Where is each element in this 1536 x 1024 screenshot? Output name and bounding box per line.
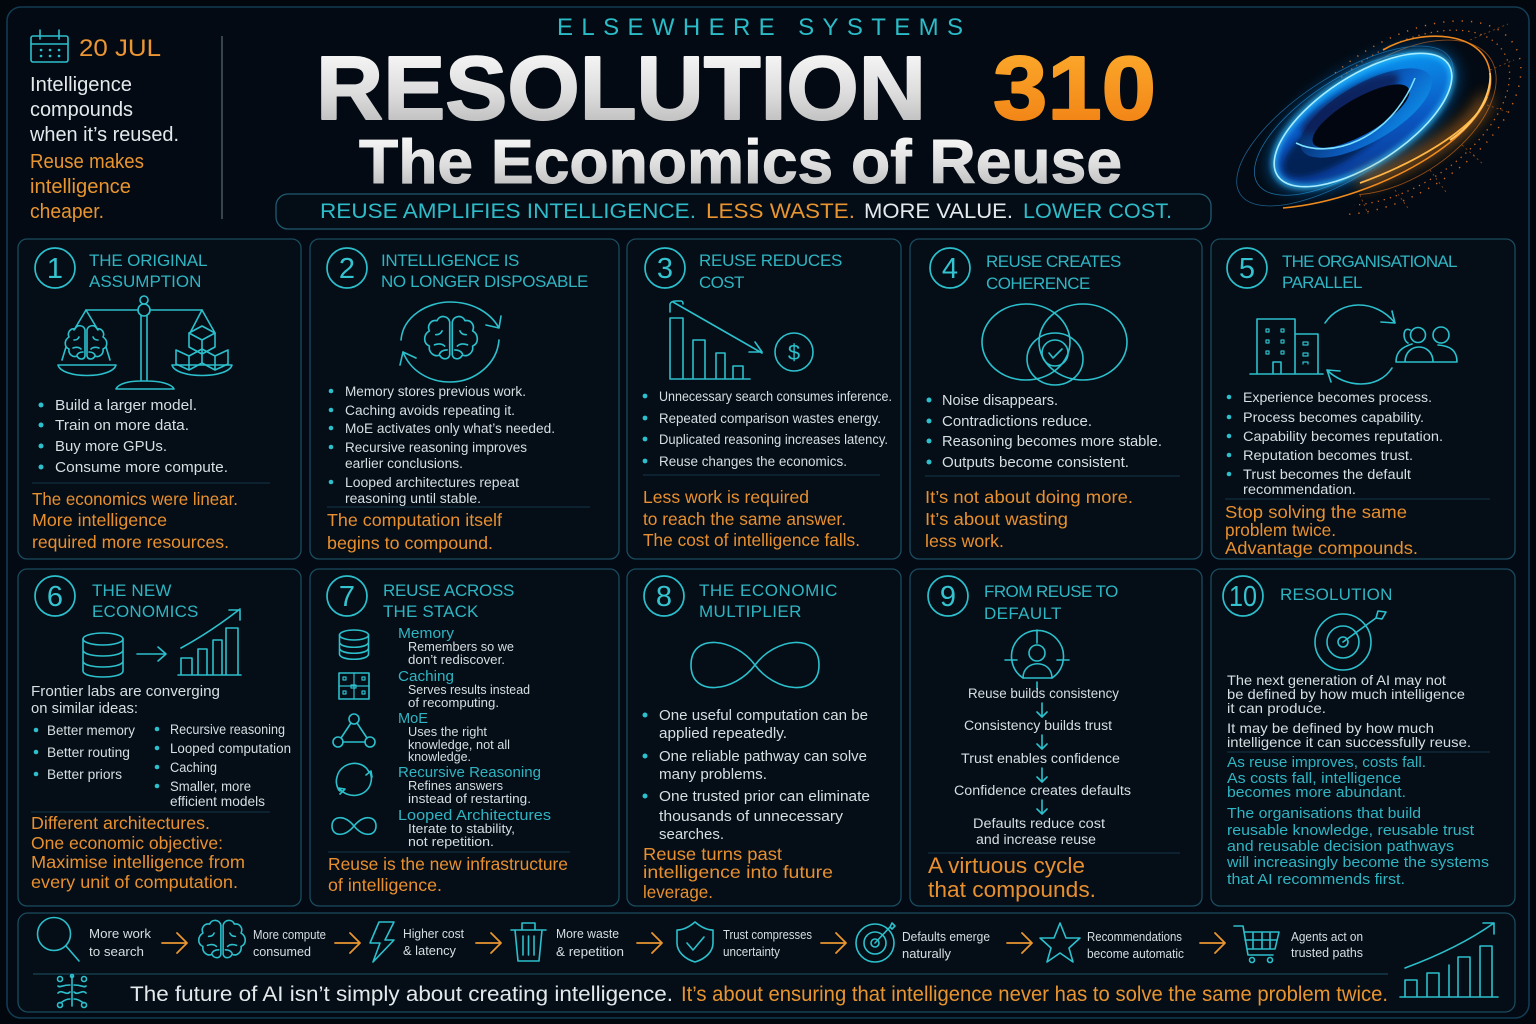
bullet list: Trust becomes the default bbox=[1243, 467, 1411, 482]
callout: Stop solving the same bbox=[1225, 502, 1407, 522]
intro text: on similar ideas: bbox=[31, 700, 138, 717]
bullet list: Looped architectures repeat bbox=[345, 475, 519, 490]
heading: THE NEW bbox=[92, 581, 172, 600]
number 3: 3 bbox=[657, 253, 673, 285]
label: more work bbox=[89, 927, 152, 959]
cyan statement: As costs fall, intelligence bbox=[1227, 770, 1401, 787]
number 6 bbox=[35, 576, 75, 616]
label: defaults emerge: naturally bbox=[902, 947, 952, 961]
panel 2: intelligence is no longer disposable bbox=[310, 239, 619, 559]
stack list: instead of restarting. bbox=[408, 792, 531, 806]
icon: building and people cycle bbox=[1250, 305, 1457, 384]
icon: star bbox=[1040, 923, 1080, 962]
icon: target with arrow bbox=[1315, 611, 1386, 670]
panel 4: reuse creates coherence bbox=[910, 239, 1202, 559]
intro text: compounds bbox=[30, 99, 133, 121]
intro orange text: Reuse makes bbox=[30, 151, 144, 173]
bullet list left: Better memory bbox=[47, 723, 135, 738]
number 1 bbox=[35, 248, 75, 288]
heading: ASSUMPTION bbox=[89, 272, 202, 291]
cyan conclusion bbox=[1226, 805, 1489, 888]
cycle steps: and increase reuse bbox=[976, 832, 1096, 847]
cyan conclusion: and reusable decision pathways bbox=[1227, 838, 1454, 855]
bullet list: Capability becomes reputation. bbox=[1243, 429, 1443, 444]
label: agents act: trusted paths bbox=[1291, 946, 1363, 960]
callout bbox=[327, 510, 502, 553]
heading: ECONOMICS bbox=[92, 602, 199, 621]
bullet list: Process becomes capability. bbox=[1243, 410, 1424, 425]
bullet list bbox=[642, 707, 870, 843]
tagline pill: MORE VALUE. bbox=[864, 200, 1013, 223]
bullet list: Reputation becomes trust. bbox=[1243, 448, 1413, 463]
label: trust compresses bbox=[723, 928, 812, 959]
callout: Maximise intelligence from bbox=[31, 852, 245, 872]
label: defaults emerge bbox=[902, 930, 990, 961]
callout: One economic objective: bbox=[31, 833, 223, 853]
callout: problem twice. bbox=[1225, 520, 1336, 540]
label: more compute bbox=[253, 928, 326, 959]
icon: trash can bbox=[511, 923, 546, 961]
title: 310 bbox=[993, 39, 1156, 139]
bullet list: Reuse changes the economics. bbox=[659, 454, 847, 469]
cyan conclusion: that AI recommends first. bbox=[1227, 871, 1405, 888]
stack list: Remembers so we bbox=[408, 640, 514, 654]
heading: MULTIPLIER bbox=[699, 602, 802, 621]
heading bbox=[699, 581, 838, 621]
label: more waste bbox=[556, 927, 624, 959]
label: more work: More work bbox=[89, 927, 152, 941]
bullet list: Noise disappears. bbox=[942, 392, 1058, 409]
number 9 bbox=[928, 576, 968, 616]
callout: intelligence into future bbox=[643, 862, 833, 882]
heading: FROM REUSE TO bbox=[984, 582, 1119, 601]
heading: COHERENCE bbox=[986, 274, 1091, 293]
panel 8: the economic multiplier bbox=[627, 569, 901, 906]
label: more work: to search bbox=[89, 945, 144, 959]
bullet list left: Better routing bbox=[47, 745, 130, 760]
arrow bbox=[1007, 933, 1032, 953]
heading: NO LONGER DISPOSABLE bbox=[381, 272, 589, 291]
callout: that compounds. bbox=[928, 877, 1096, 902]
cycle steps: Reuse builds consistency bbox=[968, 686, 1119, 701]
icon: person in crosshair bbox=[1005, 630, 1069, 689]
bullet list: One reliable pathway can solve bbox=[659, 748, 867, 765]
icon: magnifier bbox=[38, 918, 79, 961]
stack list: Looped Architectures bbox=[398, 808, 551, 824]
number 10 bbox=[1223, 576, 1263, 616]
bullet list: many problems. bbox=[659, 766, 767, 783]
stack list: not repetition. bbox=[408, 835, 494, 849]
bullet list bbox=[38, 397, 228, 476]
body text: be defined by how much intelligence bbox=[1227, 686, 1465, 702]
callout bbox=[643, 487, 860, 550]
bullet list right: Smaller, more bbox=[170, 779, 251, 794]
label: more waste: More waste bbox=[556, 927, 619, 941]
heading bbox=[699, 251, 843, 292]
heading: THE ORIGINAL bbox=[89, 251, 208, 270]
date: 20 JUL bbox=[79, 35, 161, 62]
callout: More intelligence bbox=[32, 510, 167, 530]
callout: of intelligence. bbox=[328, 875, 442, 895]
closing statement bbox=[130, 983, 1388, 1006]
bullet list: Buy more GPUs. bbox=[55, 438, 167, 455]
number 1: 1 bbox=[47, 253, 63, 285]
callout bbox=[31, 813, 245, 892]
label: trust compresses: Trust compresses bbox=[723, 928, 812, 942]
bullet list bbox=[643, 389, 892, 469]
arrow bbox=[162, 933, 187, 953]
bullet list: reasoning until stable. bbox=[345, 491, 481, 506]
icon: falling bars and dollar: $ bbox=[788, 340, 800, 365]
icon: calendar bbox=[31, 30, 68, 62]
icon: venn diagram with check bbox=[982, 304, 1127, 385]
panel 1: the original assumption bbox=[18, 239, 301, 559]
heading: INTELLIGENCE IS bbox=[381, 251, 520, 270]
heading: DEFAULT bbox=[984, 604, 1062, 623]
body text bbox=[1227, 672, 1471, 750]
callout: Different architectures. bbox=[31, 813, 210, 833]
heading bbox=[381, 251, 589, 291]
heading: THE ORGANISATIONAL bbox=[1282, 252, 1458, 271]
callout: The computation itself bbox=[327, 510, 502, 530]
title: RESOLUTION bbox=[316, 39, 926, 139]
stack list: MoE bbox=[398, 711, 428, 727]
illustration: glowing blue and orange torus bbox=[1213, 0, 1536, 236]
body text: The next generation of AI may not bbox=[1227, 672, 1446, 688]
icon: looped infinity bbox=[332, 818, 376, 834]
callout: The cost of intelligence falls. bbox=[643, 530, 860, 550]
label: higher cost: & latency bbox=[403, 944, 457, 958]
date block bbox=[29, 30, 179, 223]
panel 10: resolution bbox=[1211, 569, 1515, 906]
stack list: Memory bbox=[398, 626, 455, 642]
tagline pill: LOWER COST. bbox=[1023, 200, 1172, 223]
icon: brain in reuse cycle bbox=[400, 302, 501, 382]
callout bbox=[328, 854, 568, 895]
icon: shield with check bbox=[677, 922, 713, 962]
bullet list right: Looped computation bbox=[170, 741, 291, 756]
panel 6: the new economics bbox=[18, 569, 301, 906]
intro text: Frontier labs are converging bbox=[31, 683, 220, 700]
callout: Reuse is the new infrastructure bbox=[328, 854, 568, 874]
bullet list: Reasoning becomes more stable. bbox=[942, 433, 1162, 450]
bullet list: applied repeatedly. bbox=[659, 725, 787, 742]
icon: balance scale with brain and cubes bbox=[58, 296, 232, 389]
label: trust compresses: uncertainty bbox=[723, 945, 781, 959]
label: higher cost: Higher cost bbox=[403, 927, 464, 941]
bullet list: Experience becomes process. bbox=[1243, 390, 1432, 405]
number 8: 8 bbox=[656, 581, 672, 613]
icon: database to growth chart bbox=[83, 609, 241, 677]
bullet list right: efficient models bbox=[170, 794, 265, 809]
body text: it can produce. bbox=[1227, 700, 1326, 716]
bullet list right bbox=[155, 722, 291, 809]
heading bbox=[1282, 252, 1458, 292]
heading bbox=[89, 251, 208, 291]
number 8 bbox=[644, 576, 684, 616]
icon: recursive loop bbox=[336, 763, 372, 795]
label: recommendations: Recommendations bbox=[1087, 930, 1182, 944]
stack list: don’t rediscover. bbox=[408, 653, 505, 667]
intro text: Intelligence bbox=[30, 74, 132, 96]
number 6: 6 bbox=[47, 581, 63, 613]
number 7: 7 bbox=[339, 581, 355, 613]
number 5: 5 bbox=[1239, 253, 1255, 285]
heading: RESOLUTION bbox=[1280, 585, 1393, 604]
tagline pill bbox=[276, 194, 1211, 229]
heading: THE ECONOMIC bbox=[699, 581, 838, 600]
callout: required more resources. bbox=[32, 532, 229, 552]
bullet list: recommendation. bbox=[1243, 482, 1356, 497]
stack list: knowledge, not all bbox=[408, 738, 510, 752]
callout: A virtuous cycle bbox=[928, 853, 1085, 878]
callout: The economics were linear. bbox=[32, 489, 238, 509]
bullet list: searches. bbox=[659, 826, 724, 843]
arrow bbox=[821, 933, 846, 953]
bullet list left: Better priors bbox=[47, 767, 122, 782]
intro text: when it’s reused. bbox=[29, 124, 179, 146]
number 10: 10 bbox=[1229, 581, 1257, 613]
closing statement: The future of AI isn’t simply about creating intelligence. bbox=[130, 983, 673, 1006]
bullet list: earlier conclusions. bbox=[345, 456, 463, 471]
body text: intelligence it can successfully reuse. bbox=[1227, 734, 1471, 750]
icon: falling bars and dollar bbox=[670, 301, 813, 379]
callout: less work. bbox=[925, 531, 1004, 551]
stack list: Recursive Reasoning bbox=[398, 765, 541, 781]
intro text bbox=[31, 683, 220, 717]
tagline pill: REUSE AMPLIFIES INTELLIGENCE. bbox=[320, 200, 696, 223]
heading: REUSE REDUCES bbox=[699, 251, 843, 270]
arrow bbox=[637, 933, 662, 953]
icon: memory database bbox=[340, 630, 368, 659]
heading bbox=[383, 581, 515, 621]
body text: It may be defined by how much bbox=[1227, 720, 1434, 736]
number 2 bbox=[327, 248, 367, 288]
icon: infinity bbox=[691, 642, 819, 688]
bullet list: MoE activates only what’s needed. bbox=[345, 421, 555, 436]
callout: every unit of computation. bbox=[31, 872, 238, 892]
callout: Advantage compounds. bbox=[1225, 538, 1418, 558]
cyan statement bbox=[1227, 754, 1426, 801]
stack list bbox=[398, 626, 551, 849]
callout bbox=[32, 489, 238, 552]
intro text bbox=[29, 74, 179, 146]
icon: target bbox=[856, 923, 895, 962]
icon: caching grid bbox=[339, 673, 369, 699]
label: defaults emerge: Defaults emerge bbox=[902, 930, 990, 944]
bullet list: Unnecessary search consumes inference. bbox=[659, 389, 892, 404]
label: agents act: Agents act on bbox=[1291, 930, 1363, 944]
icon: brain bbox=[199, 920, 245, 958]
stack list: Refines answers bbox=[408, 779, 503, 793]
heading: COST bbox=[699, 273, 745, 292]
stack list: Caching bbox=[398, 669, 454, 685]
bullet list: Consume more compute. bbox=[55, 459, 228, 476]
arrow bbox=[335, 933, 360, 953]
callout: Less work is required bbox=[643, 487, 809, 507]
heading: REUSE CREATES bbox=[986, 252, 1122, 271]
callout: It’s not about doing more. bbox=[925, 487, 1133, 507]
number 9: 9 bbox=[940, 581, 956, 613]
callout bbox=[925, 487, 1133, 551]
heading bbox=[92, 581, 199, 621]
arrow bbox=[1200, 933, 1225, 953]
closing statement: It’s about ensuring that intelligence never has to solve the same problem twice. bbox=[681, 983, 1388, 1006]
callout: leverage. bbox=[643, 882, 713, 902]
cyan conclusion: The organisations that build bbox=[1227, 805, 1421, 822]
label: recommendations: become automatic bbox=[1087, 947, 1184, 961]
cyan conclusion: will increasingly become the systems bbox=[1226, 854, 1489, 871]
bullet list: Duplicated reasoning increases latency. bbox=[659, 432, 888, 447]
number 3 bbox=[645, 248, 685, 288]
panel 9: from reuse to default bbox=[910, 569, 1202, 906]
panel 3: reuse reduces cost bbox=[627, 239, 901, 559]
label: agents act bbox=[1291, 930, 1363, 960]
callout: Reuse turns past bbox=[643, 844, 782, 864]
label: more waste: & repetition bbox=[556, 945, 624, 959]
stack list: Serves results instead bbox=[408, 683, 530, 697]
cycle steps bbox=[954, 686, 1131, 847]
bullet list right: Recursive reasoning bbox=[170, 722, 285, 737]
number 5 bbox=[1227, 248, 1267, 288]
label: higher cost bbox=[403, 927, 464, 958]
brand name: ELSEWHERE SYSTEMS bbox=[557, 14, 963, 41]
subtitle: The Economics of Reuse bbox=[359, 128, 1122, 197]
heading: REUSE ACROSS bbox=[383, 581, 515, 600]
label: more compute: consumed bbox=[253, 945, 311, 959]
callout: begins to compound. bbox=[327, 533, 493, 553]
number 2: 2 bbox=[339, 253, 355, 285]
bullet list: Train on more data. bbox=[55, 417, 189, 434]
heading bbox=[984, 582, 1119, 623]
stack list: of recomputing. bbox=[408, 696, 499, 710]
panel 7: reuse across the stack bbox=[310, 569, 619, 906]
bullet list: Memory stores previous work. bbox=[345, 384, 526, 399]
label: more compute: More compute bbox=[253, 928, 326, 942]
number 4 bbox=[930, 248, 970, 288]
stack list: Uses the right bbox=[408, 725, 488, 739]
heading: THE STACK bbox=[383, 602, 479, 621]
stack list: Iterate to stability, bbox=[408, 822, 515, 836]
bullet list bbox=[329, 384, 555, 506]
intro orange text: cheaper. bbox=[30, 201, 104, 223]
bullet list left bbox=[34, 723, 135, 782]
panel: bottom flow strip bbox=[18, 913, 1515, 1012]
bullet list: One trusted prior can eliminate bbox=[659, 788, 870, 805]
cycle steps: Trust enables confidence bbox=[961, 751, 1120, 766]
bullet list: Caching avoids repeating it. bbox=[345, 403, 515, 418]
bullet list: Build a larger model. bbox=[55, 397, 197, 414]
cycle steps: Defaults reduce cost bbox=[973, 816, 1105, 831]
callout bbox=[1225, 502, 1418, 558]
intro orange text: intelligence bbox=[30, 176, 131, 198]
callout: It’s about wasting bbox=[925, 509, 1068, 529]
number 7 bbox=[327, 576, 367, 616]
icon: network chip bbox=[58, 974, 86, 1008]
icon: shopping cart bbox=[1234, 926, 1279, 962]
label: recommendations bbox=[1087, 930, 1184, 961]
icon: triangle network bbox=[333, 714, 375, 747]
cyan statement: As reuse improves, costs fall. bbox=[1227, 754, 1426, 771]
cycle steps: Confidence creates defaults bbox=[954, 783, 1131, 798]
bullet list right: Caching bbox=[170, 760, 217, 775]
number 4: 4 bbox=[942, 253, 958, 285]
arrow bbox=[476, 933, 501, 953]
cyan statement: becomes more abundant. bbox=[1227, 784, 1406, 801]
callout bbox=[928, 853, 1096, 902]
panel 5: the organisational parallel bbox=[1211, 239, 1515, 559]
bullet list: Recursive reasoning improves bbox=[345, 440, 527, 455]
icon: lightning bolt bbox=[370, 922, 394, 962]
bullet list: Outputs become consistent. bbox=[942, 454, 1129, 471]
bullet list bbox=[926, 392, 1162, 471]
cyan conclusion: reusable knowledge, reusable trust bbox=[1227, 822, 1475, 839]
heading bbox=[986, 252, 1122, 293]
tagline pill: LESS WASTE. bbox=[706, 200, 855, 223]
bullet list: Repeated comparison wastes energy. bbox=[659, 411, 881, 426]
bullet list: One useful computation can be bbox=[659, 707, 868, 724]
bullet list bbox=[1227, 390, 1443, 497]
stack list: knowledge. bbox=[408, 750, 471, 764]
intro orange text bbox=[30, 151, 144, 223]
callout bbox=[643, 844, 833, 902]
bullet list: thousands of unnecessary bbox=[659, 808, 844, 825]
cycle steps: Consistency builds trust bbox=[964, 718, 1112, 733]
heading: PARALLEL bbox=[1282, 273, 1363, 292]
bullet list: Contradictions reduce. bbox=[942, 413, 1092, 430]
callout: to reach the same answer. bbox=[643, 509, 846, 529]
icon: growth chart bbox=[1400, 923, 1498, 997]
